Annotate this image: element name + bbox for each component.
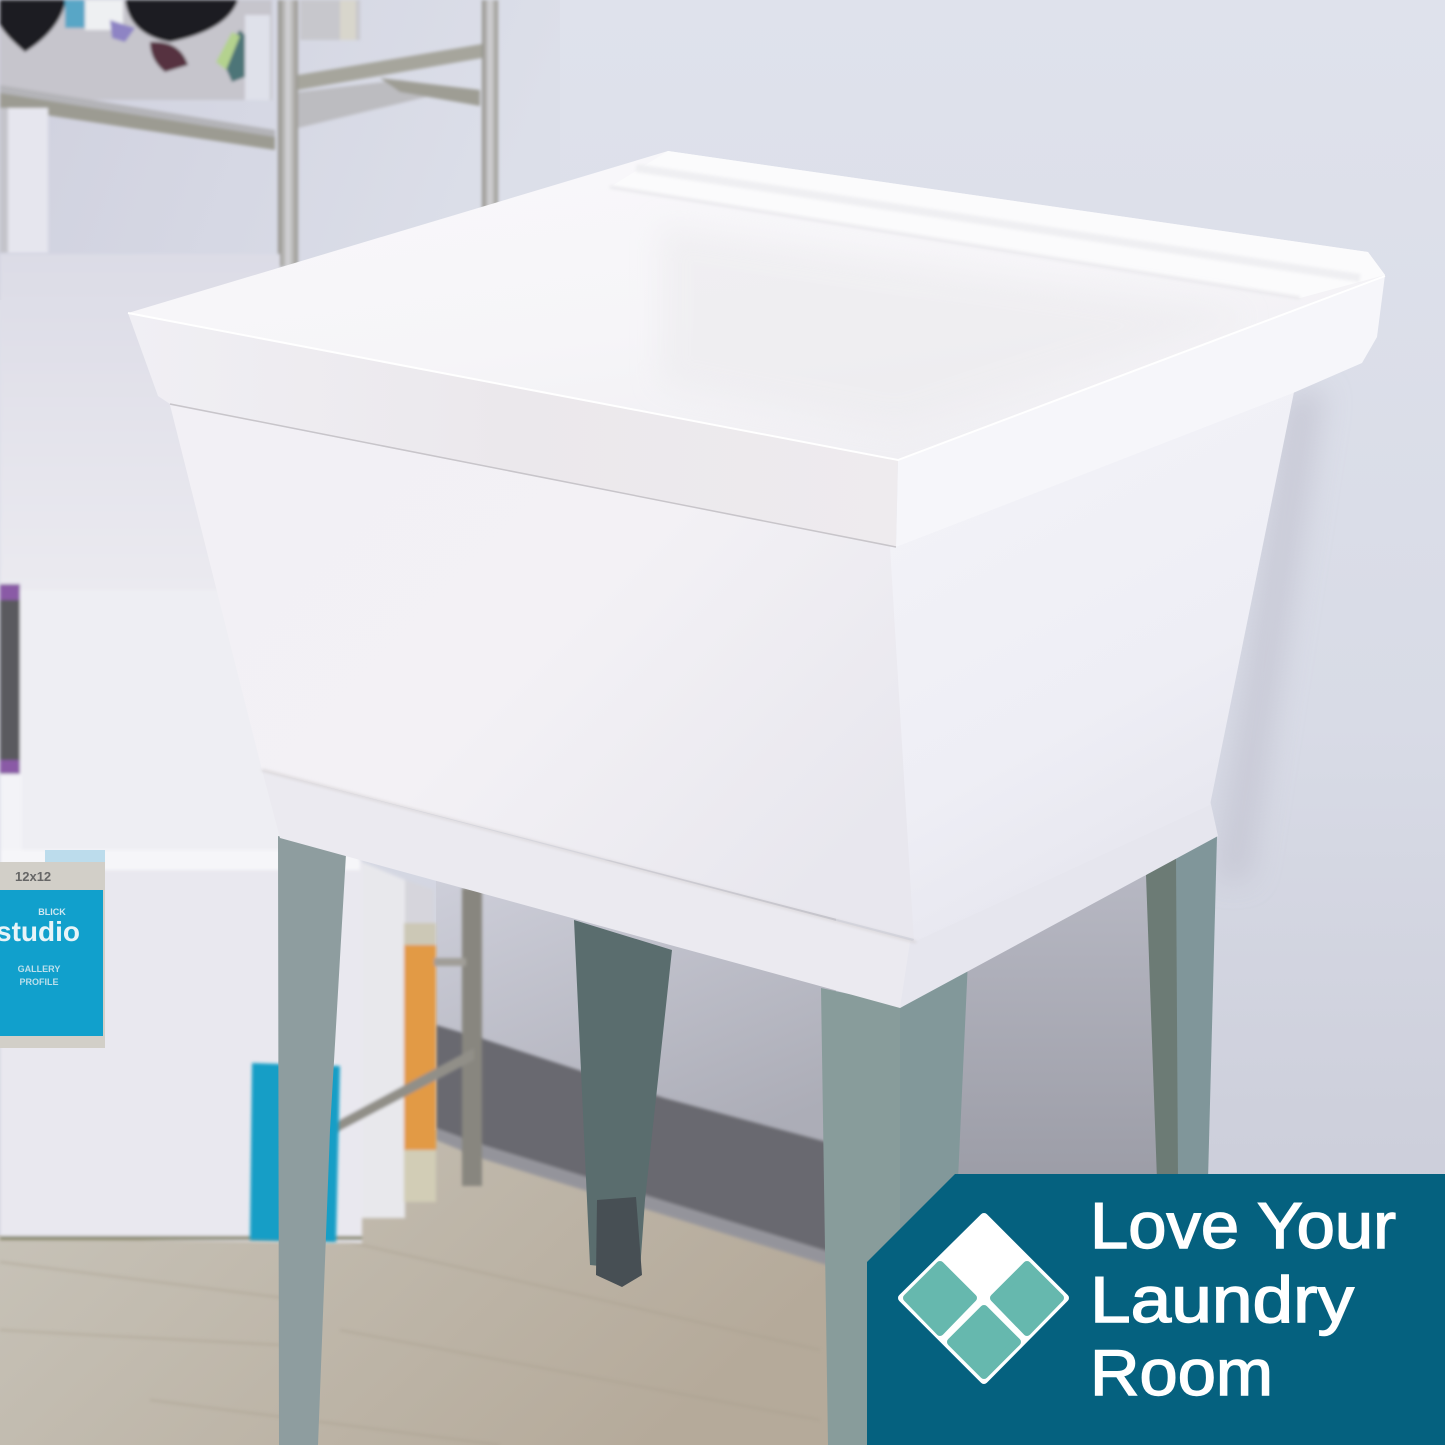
metal shelving unit: [0, 0, 498, 267]
canvas label: Blick Studio: GALLERY: [18, 964, 60, 974]
badge title: [1090, 1189, 1396, 1409]
back right leg: [1146, 836, 1217, 1180]
teal tile left: [907, 1265, 973, 1332]
badge title: Room: [1090, 1336, 1273, 1409]
white diamond: [902, 1217, 1065, 1380]
rim front face: [128, 313, 898, 547]
large rear canvas: [0, 254, 280, 620]
lower skirt front: [262, 770, 916, 1008]
rack post: [462, 888, 482, 1186]
shelf contents: [0, 0, 360, 100]
basin front face: [170, 405, 918, 940]
front canvas: [0, 852, 362, 1243]
teal tile bottom: [951, 1309, 1017, 1375]
baseboard: [436, 1025, 830, 1266]
badge background: [867, 1174, 1445, 1445]
dark label on middle canvas: [0, 584, 20, 774]
rim top surface: [128, 151, 1385, 460]
stacked white canvases: [0, 254, 482, 1243]
back shelf: [610, 151, 1385, 298]
basin right face: [890, 392, 1294, 942]
badge title: Laundry: [1090, 1263, 1355, 1336]
middle canvas: [22, 590, 282, 860]
blue box corner: [250, 1063, 340, 1242]
basin interior shading: [660, 225, 1250, 430]
front left leg: [278, 836, 346, 1445]
teal tile right: [994, 1265, 1060, 1332]
canvas label: Blick Studio: PROFILE: [19, 977, 59, 987]
floor: [0, 1130, 860, 1445]
canvas label: Blick Studio: 12x12: [15, 869, 51, 884]
lower skirt right: [900, 800, 1218, 1008]
back center leg: [574, 920, 672, 1287]
canvas label: Blick Studio: [0, 850, 105, 1048]
shelf rails: [0, 92, 275, 150]
book spines: [362, 862, 405, 1218]
rim right face: [896, 275, 1385, 547]
laundry sink: [128, 151, 1385, 1008]
front center leg: [821, 960, 968, 1445]
rack brace: [330, 1048, 474, 1136]
badge title: Love Your: [1090, 1189, 1396, 1262]
canvas label: Blick Studio: BLICK: [38, 907, 66, 917]
logo: diamond tiles: [902, 1217, 1065, 1380]
